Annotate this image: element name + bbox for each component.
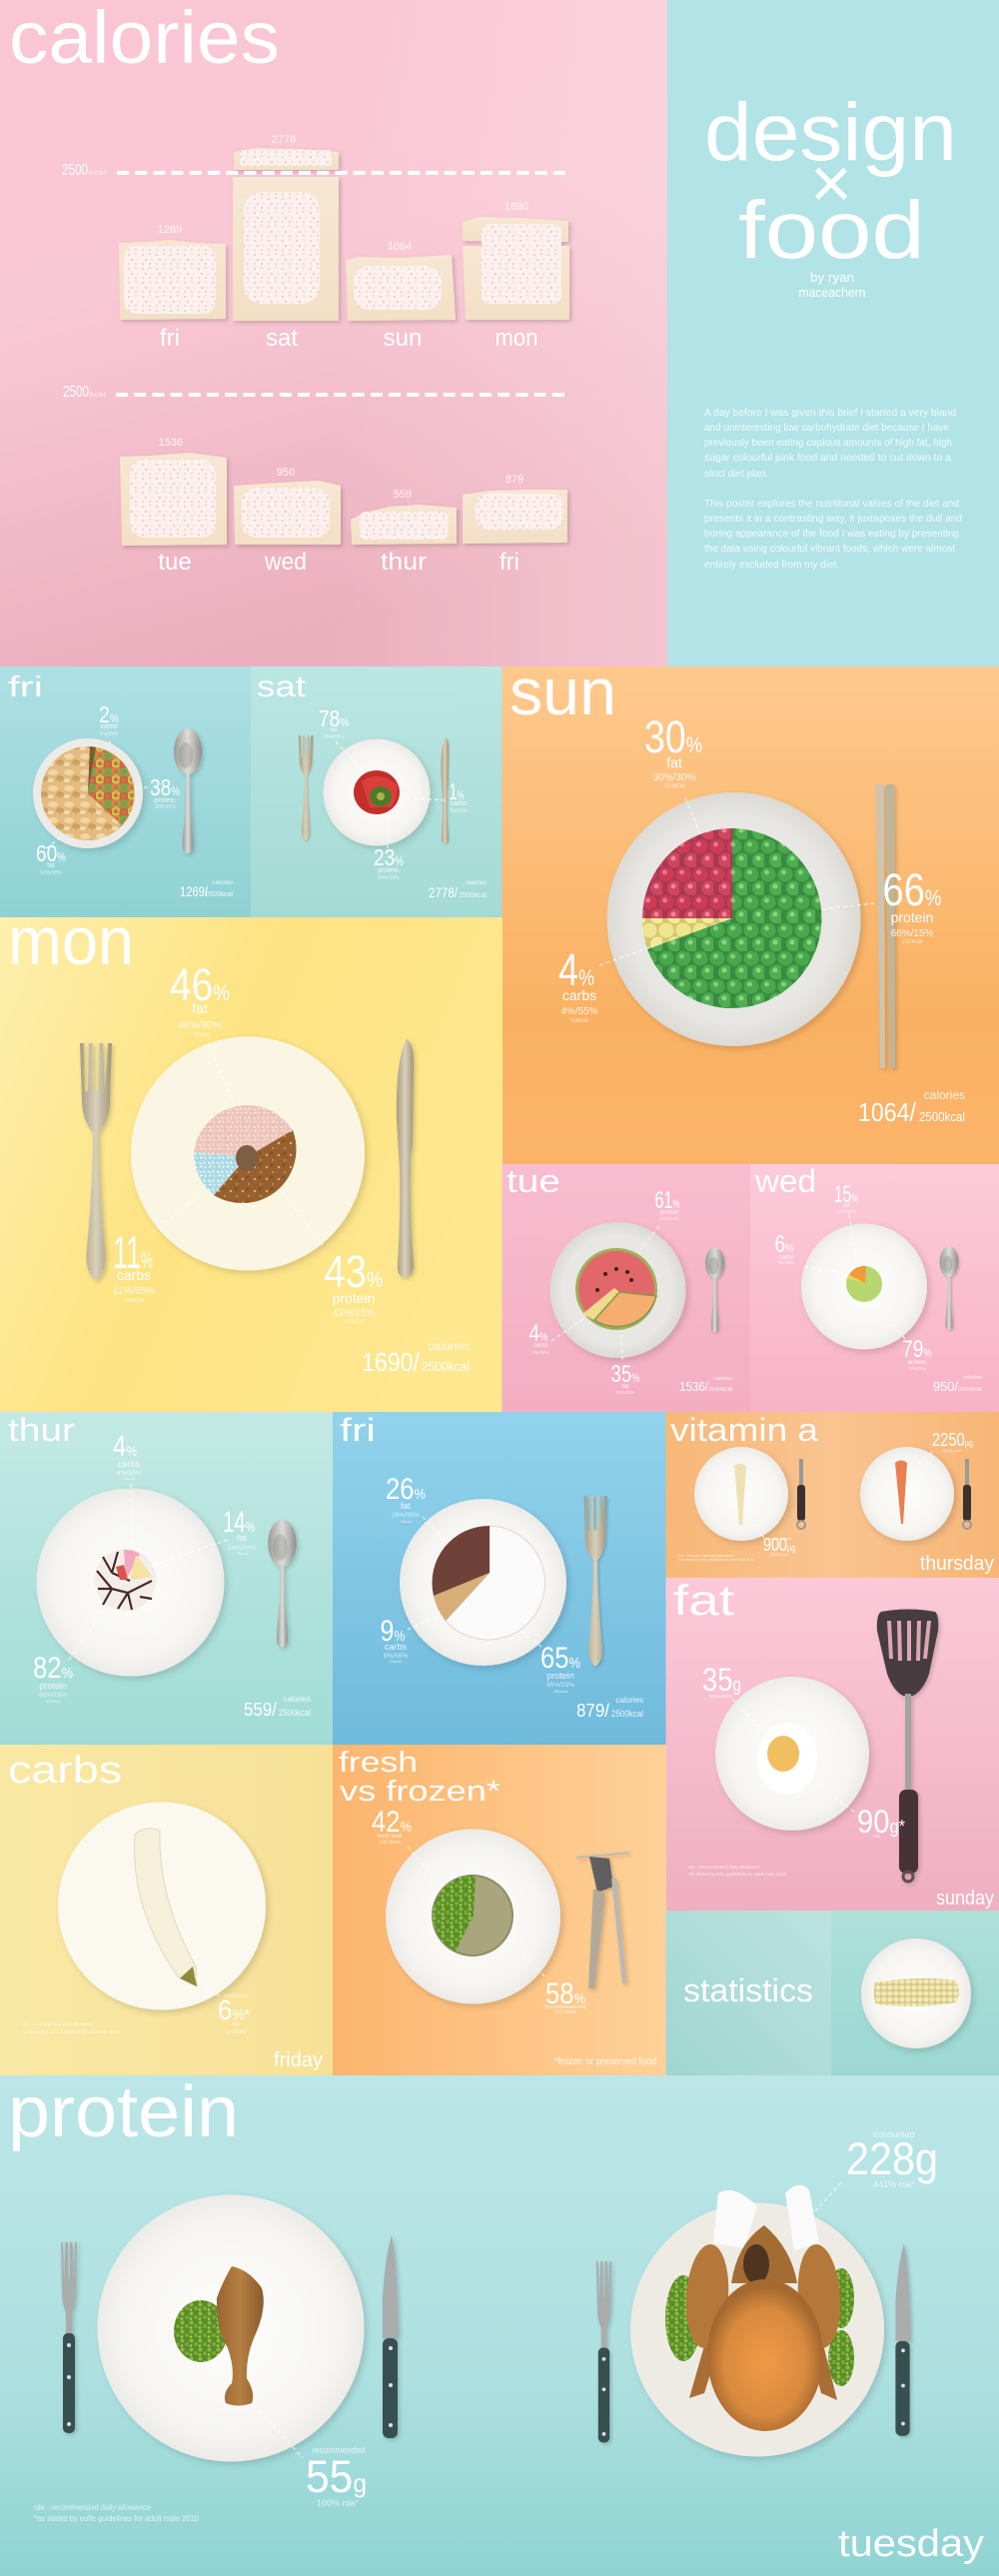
total calories (244, 1695, 311, 1720)
footnote: rda - recommended daily allowance (688, 1865, 760, 1870)
total calories: 559/ (244, 1700, 277, 1720)
stat: fresh food: fresh food (378, 1834, 402, 1840)
heading: carbs (8, 1750, 122, 1792)
stat: fat: 15% (834, 1181, 858, 1208)
stat: protein: 23% (374, 844, 404, 870)
bar values and day labels, first row: sun (384, 325, 422, 352)
panel: tuesday melons (501, 1163, 751, 1413)
stat: frozen food: frozen/preserved (544, 2004, 586, 2010)
heading (339, 1747, 500, 1808)
footnote (678, 1554, 754, 1562)
stat: recommended fat: rda (872, 1834, 880, 1840)
stat: protein: protein (546, 1671, 574, 1681)
panel: calories (0, 0, 667, 667)
stat: fat: fat (622, 1384, 629, 1390)
stat: protein: 23%/15% (378, 875, 400, 881)
total calories: calories (283, 1695, 311, 1704)
icon: spoon (940, 1246, 958, 1330)
icon: spoon (705, 1247, 724, 1332)
day label: thursday (920, 1553, 994, 1575)
total calories: 879/ (576, 1701, 609, 1721)
heading: fri (340, 1412, 376, 1448)
stat: carbs: 6% (775, 1231, 794, 1258)
total calories: 950/ (933, 1379, 958, 1394)
stat: protein (324, 1246, 384, 1325)
stat: fat: fat (843, 1203, 850, 1209)
icon: fork (80, 1043, 112, 1280)
stat: carbs: 22kcal (123, 1476, 135, 1481)
total calories: 2500kcal (422, 1359, 470, 1374)
byline (799, 270, 865, 300)
leader lines (336, 741, 446, 848)
bar values and day labels, second row (158, 437, 523, 576)
icon: plate with chicken leg and broccoli (98, 2194, 364, 2462)
icon: spatula (877, 1609, 938, 1882)
stat: protein (33, 1652, 73, 1704)
stat: carbs: 2% (99, 701, 119, 727)
panel: wednesday cookie (750, 1163, 999, 1413)
footnote (34, 2503, 200, 2523)
total calories (362, 1339, 470, 1377)
bar values and day labels, second row: thur (381, 549, 427, 576)
stat: carbs: 11% (113, 1227, 153, 1278)
stat: consumed protein: consumed (873, 2129, 915, 2139)
stat: protein: protein (378, 867, 400, 874)
heading: fri (8, 671, 43, 703)
panel: fresh vs frozen (333, 1745, 666, 2075)
stat: carbs: carbs (533, 1343, 547, 1349)
bar values and day labels, first row (158, 134, 537, 352)
stat: carbs (380, 1615, 408, 1664)
bar values and day labels, second row: tue (158, 549, 192, 576)
icon: spoon (268, 1520, 297, 1647)
stat: protein: protein (891, 909, 933, 925)
heading: wed (754, 1163, 816, 1199)
target line: 2500 kcal, second row (63, 384, 570, 401)
bar values and day labels, first row: 1690 (504, 201, 528, 213)
stat: protein: 65% (540, 1642, 580, 1675)
stat: fat: 26% (386, 1473, 426, 1506)
stat: carbs: 11%/55% (113, 1286, 155, 1297)
heading: fresh (339, 1747, 418, 1779)
stat: carbs: 2%/55% (100, 731, 119, 737)
bar values and day labels, first row: 1064 (388, 241, 412, 253)
bar values and day labels, second row: 950 (277, 467, 295, 479)
icon: spoon (174, 728, 202, 853)
panel: monday doughnut (0, 903, 502, 1413)
leader lines (153, 1044, 324, 1247)
stat: protein: 82% (33, 1652, 73, 1685)
day label: sunday (936, 1888, 994, 1910)
stat: consumed carbs: 135/300g (226, 2029, 247, 2035)
total calories: 2500kcal (279, 1708, 311, 1718)
leader lines (599, 798, 874, 965)
bar values and day labels, first row: fri (160, 325, 180, 352)
total calories: 1064/ (858, 1097, 917, 1127)
stat: carbs: carbs (450, 800, 468, 807)
stat: protein: 82%/15% (39, 1692, 67, 1699)
stat: 900 micrograms: recommended (766, 1536, 792, 1541)
bar values and day labels, second row: wed (264, 549, 307, 576)
stat: protein: protein (660, 1210, 678, 1216)
icon: fork (583, 1496, 607, 1667)
heading: statistics (683, 1972, 813, 2008)
footnote: *as stated by eufic guidelines for adult male 2010 (688, 1872, 787, 1877)
bar values and day labels, second row: 879 (505, 474, 523, 486)
target line: 2500 kcal, second row: kcal (90, 392, 105, 399)
stat: fat: 778kcal (190, 1032, 210, 1038)
stat: protein: 61% (655, 1187, 680, 1214)
stat: fat: fat (237, 1533, 247, 1543)
stat: fat: 78kcal (400, 1519, 412, 1524)
bar values and day labels, second row: 1536 (159, 437, 183, 449)
stat: protein: 38%/15% (154, 804, 176, 810)
icon: fork (299, 735, 313, 841)
total calories: calories (429, 1339, 470, 1353)
bar values and day labels, first row: mon (496, 325, 537, 352)
total calories: 2500kcal (459, 892, 487, 899)
total calories: 2500kcal (205, 891, 233, 898)
day label: friday (274, 2049, 323, 2071)
target line: 2500 kcal, first row: kcal (89, 170, 106, 177)
stat: protein: 726kcal (344, 1319, 364, 1325)
stat: fresh food: 42% (372, 1806, 412, 1839)
stat: protein: protein (908, 1360, 926, 1366)
intro text: boring appearance of the food I was eating by presenting (704, 529, 959, 540)
stat: fat: fat (331, 727, 338, 733)
stat: protein: 79%/15% (907, 1366, 927, 1371)
stat: carbs: 4% (113, 1430, 137, 1463)
stat: fat (644, 711, 702, 789)
stat: recommended fat: 90g* (857, 1804, 905, 1840)
stat: fat: 14% (223, 1506, 255, 1539)
footnote: *as stated by eufic guidelines for adult male 2010 (34, 2514, 200, 2523)
total calories: calories (212, 880, 233, 886)
stat: carbs: 9%/55% (384, 1653, 408, 1660)
icon: plate with corn (861, 1938, 971, 2048)
stat: 900 micrograms: 900µg (763, 1535, 795, 1555)
stat: fat: 15%/30% (836, 1209, 856, 1214)
panel: friday cake (333, 1412, 666, 1746)
stat: fat: 60%/30% (40, 870, 62, 876)
title: design x food: design (704, 87, 957, 178)
chart: pop tart bars, second row (120, 453, 567, 546)
stat: fat: 30% (644, 711, 702, 762)
stat: protein: 489kcal (553, 1689, 567, 1694)
stat: carbs: carbs (562, 987, 596, 1003)
total calories: 2778/ (429, 884, 458, 900)
stat: carbs: 9% (380, 1615, 406, 1648)
stat: consumed carbs: 6%* (218, 1994, 250, 2025)
intro text: and uninteresting low carbohydrate diet because I have (704, 423, 949, 434)
stat: carbs: 1%/55% (450, 808, 469, 814)
target line: 2500 kcal, first row (62, 162, 570, 179)
total calories (576, 1696, 643, 1721)
intro text: sugar colourful junk food and needed to cut down to a (704, 453, 951, 464)
stat: fat: 78% (319, 705, 349, 731)
heading: sun (509, 654, 616, 728)
stat: carbs: 4%/55% (117, 1470, 141, 1477)
stat: consumed protein: 228g (846, 2133, 938, 2184)
stat: protein (540, 1642, 580, 1694)
panel: fat (665, 1577, 999, 1911)
heading: protein (8, 2072, 239, 2152)
stat: carbs: 43kcal (570, 1018, 588, 1024)
stat: carbs: 4% (529, 1320, 548, 1347)
total calories: 2500kcal (708, 1387, 732, 1393)
stat: carbs: carbs (385, 1642, 408, 1652)
stat: fat: 35%/30% (615, 1390, 635, 1395)
stat: consumed carbs: rda (232, 2021, 240, 2027)
panel: corn on plate (831, 1911, 999, 2075)
total calories: calories (963, 1375, 982, 1381)
stat: consumed protein: 441% rda* (873, 2179, 916, 2189)
stat: protein: 65%/15% (546, 1682, 574, 1689)
heading: tue (506, 1163, 560, 1199)
stat: protein (374, 844, 404, 881)
stat: carbs (113, 1227, 155, 1304)
stat: recommended protein: 100% rda* (317, 2498, 360, 2508)
target line: 2500 kcal, first row: 2500 (62, 162, 88, 179)
panel: sunday candies (501, 654, 999, 1164)
leader lines (752, 1452, 932, 1538)
stat: carbs: carbs (117, 1267, 151, 1283)
footnote: *as stated by eufic guidelines for adult male 2010 (678, 1558, 754, 1562)
stat: fat: 319kcal (664, 783, 684, 789)
total calories: calories (713, 1376, 732, 1382)
stat: protein: protein (333, 1290, 375, 1306)
panel: vitamin a (665, 1412, 999, 1578)
icon: cereal bowl (33, 738, 143, 848)
stat: frozen food: 58% (545, 1977, 585, 2010)
stat: protein: 43%/15% (333, 1308, 376, 1319)
stat: recommended protein: recommended (312, 2445, 366, 2455)
stat: fat: 14%/30% (228, 1545, 256, 1552)
stat: 2250 micrograms: 2250µg (932, 1430, 973, 1450)
intro text (704, 408, 962, 571)
icon: knife (895, 2243, 911, 2436)
stat: carbs: 6%/55% (778, 1260, 794, 1265)
total calories: calories (466, 880, 487, 886)
stat: fat: fat (401, 1501, 411, 1511)
icon: plate with candies pie (607, 792, 861, 1046)
title: design x food (704, 87, 957, 276)
total calories: calories (615, 1696, 643, 1705)
leader line (195, 1976, 220, 1996)
stat: consumed fat: 35g (702, 1662, 741, 1698)
stat: carbs: carbs (779, 1255, 793, 1261)
stat: carbs: 4%/55% (532, 1350, 548, 1355)
footnote: rda - recommended daily allowance (678, 1554, 733, 1558)
total calories (180, 880, 233, 899)
footnote: *as stated by eufic guidelines for adult male 2010 (22, 2029, 121, 2034)
intro text: presents it in a contrasting way, it juxtaposes the dull and (704, 514, 962, 525)
total calories: 1690/ (362, 1347, 421, 1377)
stat: 2250 micrograms: 441% rda* (943, 1448, 962, 1453)
heading: fat (673, 1577, 734, 1625)
leader lines (46, 740, 148, 848)
stat: protein (883, 864, 941, 945)
intro text: the data using colourful vibrant foods, which were almost (704, 544, 955, 555)
icon: fork (61, 2242, 77, 2433)
stat: protein: 66% (883, 864, 941, 915)
icon: plate with cream cake (36, 1489, 224, 1677)
byline: by ryan (810, 270, 854, 285)
title: design x food: × (810, 144, 852, 224)
stat: recommended protein: 55g (306, 2451, 367, 2502)
icon: peeler (963, 1459, 971, 1529)
stat: protein: protein (154, 797, 176, 804)
chart: pop tart bars, first row (119, 148, 569, 321)
intro text: A day before I was given this brief I started a very bland (704, 408, 956, 419)
panel: protein (0, 2072, 999, 2576)
footnote (22, 2021, 121, 2034)
icon: plate with cake pie (400, 1499, 566, 1666)
total calories (429, 880, 487, 900)
stat: protein: 459kcal (46, 1699, 60, 1704)
bar values and day labels, first row: 1269 (158, 224, 182, 236)
bar values and day labels, first row: sat (266, 325, 298, 352)
stat: carbs: 186kcal (124, 1298, 144, 1304)
icon: plate with broccoli and can (386, 1829, 560, 2004)
total calories: 2500kcal (958, 1387, 982, 1393)
total calories (858, 1088, 965, 1127)
title: design x food: food (738, 185, 925, 276)
stat: fat: fat (192, 1000, 208, 1016)
panel: saturday pepper (251, 666, 502, 918)
icon: fork (596, 2261, 611, 2442)
stat: frozen food: 110 items (554, 2009, 576, 2015)
intro text: entirely excluded from my diet. (704, 560, 839, 571)
stat: protein: protein (39, 1681, 67, 1691)
stat: consumed carbs: consumed (224, 1993, 248, 1999)
panel: statistics (665, 1911, 831, 2075)
stat: carbs (113, 1430, 141, 1481)
icon: plate with carrot (860, 1447, 954, 1541)
stat: fat: 78%/30% (323, 734, 345, 740)
stat: carbs (99, 701, 119, 737)
footnote: rda - recommended daily allowance (34, 2503, 151, 2512)
stat: fat: fat (666, 754, 682, 770)
total calories: 1536/ (679, 1379, 708, 1394)
stat: fat: fat (47, 862, 55, 869)
stat: protein: 61%/15% (659, 1216, 679, 1221)
icon: knife (397, 1039, 414, 1277)
stat: protein: 79% (902, 1336, 932, 1363)
stat: fat (36, 840, 66, 876)
stat: protein: 43% (324, 1246, 384, 1297)
icon: plate with pepper (324, 739, 430, 845)
heading: mon (8, 903, 134, 979)
footnote (688, 1865, 787, 1877)
panel: friday cereal (0, 666, 251, 918)
leader lines (255, 2181, 842, 2458)
stat: carbs: 1% (450, 778, 465, 804)
stat: fat (386, 1473, 426, 1524)
stat: carbs: carbs (118, 1459, 140, 1469)
stat: protein: 702kcal (902, 939, 922, 945)
bar values and day labels, first row: 2778 (272, 134, 296, 146)
stat: carbs: 32kcal (390, 1659, 402, 1664)
total calories: 1269/ (180, 883, 208, 899)
panel: design x food intro (667, 0, 999, 667)
intro text: previously been eating copious amounts of high fat, high (704, 438, 952, 449)
stat: carbs: 4%/55% (560, 1006, 598, 1017)
stat: protein (150, 774, 180, 810)
icon: plate with pie cookie (801, 1223, 927, 1349)
total calories: calories (924, 1088, 965, 1102)
leader lines (804, 1214, 905, 1339)
bar values and day labels, second row: 559 (394, 489, 412, 501)
stat: fat (223, 1506, 256, 1556)
stat: protein: 66%/15% (891, 928, 934, 939)
leader lines (551, 1226, 659, 1360)
stat: fat: 46%/30% (179, 1020, 222, 1031)
footnote: rda - recommended daily allowance (22, 2021, 94, 2026)
target line: 2500 kcal, second row: 2500 (63, 384, 89, 401)
total calories: 2500kcal (611, 1709, 643, 1719)
stat: fat: 26%/30% (392, 1512, 420, 1519)
icon: plate with doughnut pie (131, 1037, 365, 1271)
icon: knife (441, 737, 449, 843)
bar values and day labels, second row: fri (500, 549, 519, 576)
day label: tuesday (838, 2523, 984, 2565)
stat: carbs: 4% (558, 944, 594, 995)
stat: fat: 46% (170, 959, 230, 1010)
total calories (679, 1376, 732, 1394)
icon: knife (383, 2235, 399, 2438)
icon: peeler (797, 1459, 805, 1529)
total calories (933, 1375, 982, 1394)
footnote: *frozen or preserved food (554, 2056, 656, 2067)
stat: fat: 35% (611, 1361, 640, 1388)
icon: plate with banana (58, 1803, 266, 2010)
icon: plate with whole roast chicken (630, 2185, 884, 2456)
leader lines (732, 1699, 854, 1812)
panel: carbs (0, 1745, 333, 2075)
icon: plate with parsnip (694, 1447, 788, 1541)
leader lines (408, 1517, 541, 1647)
stat: fat: 30%/30% (653, 772, 696, 783)
icon: plate with watermelon and melon (549, 1222, 685, 1358)
stat: fat (170, 959, 230, 1038)
leader lines (408, 1847, 544, 1976)
heading: thur (8, 1412, 75, 1448)
total calories: 2500kcal (919, 1109, 965, 1124)
stat: fresh food: 105 items (379, 1840, 401, 1846)
intro text: strict diet plan. (704, 469, 768, 480)
heading: vs frozen* (340, 1776, 500, 1808)
stat: fat: 60% (36, 840, 66, 866)
heading: sat (257, 670, 307, 703)
stat: carbs (558, 944, 598, 1024)
panel: thursday cake (0, 1412, 333, 1746)
stat: carbs: carbs (100, 723, 118, 730)
stat: protein: 38% (150, 774, 180, 800)
icon: can opener (576, 1853, 629, 1988)
byline: maceachern (799, 285, 865, 300)
icon: plate with fried egg (715, 1677, 869, 1831)
icon: chopsticks (876, 784, 895, 1068)
stat: consumed fat: consumed (708, 1694, 732, 1700)
heading: vitamin a (670, 1412, 818, 1448)
stat: 900 micrograms: 100% rda* (770, 1552, 789, 1557)
intro text: This poster explores the nutritional values of the diet and (704, 499, 959, 510)
stat: fat: 78kcal (236, 1551, 248, 1556)
leader lines (69, 1484, 228, 1660)
